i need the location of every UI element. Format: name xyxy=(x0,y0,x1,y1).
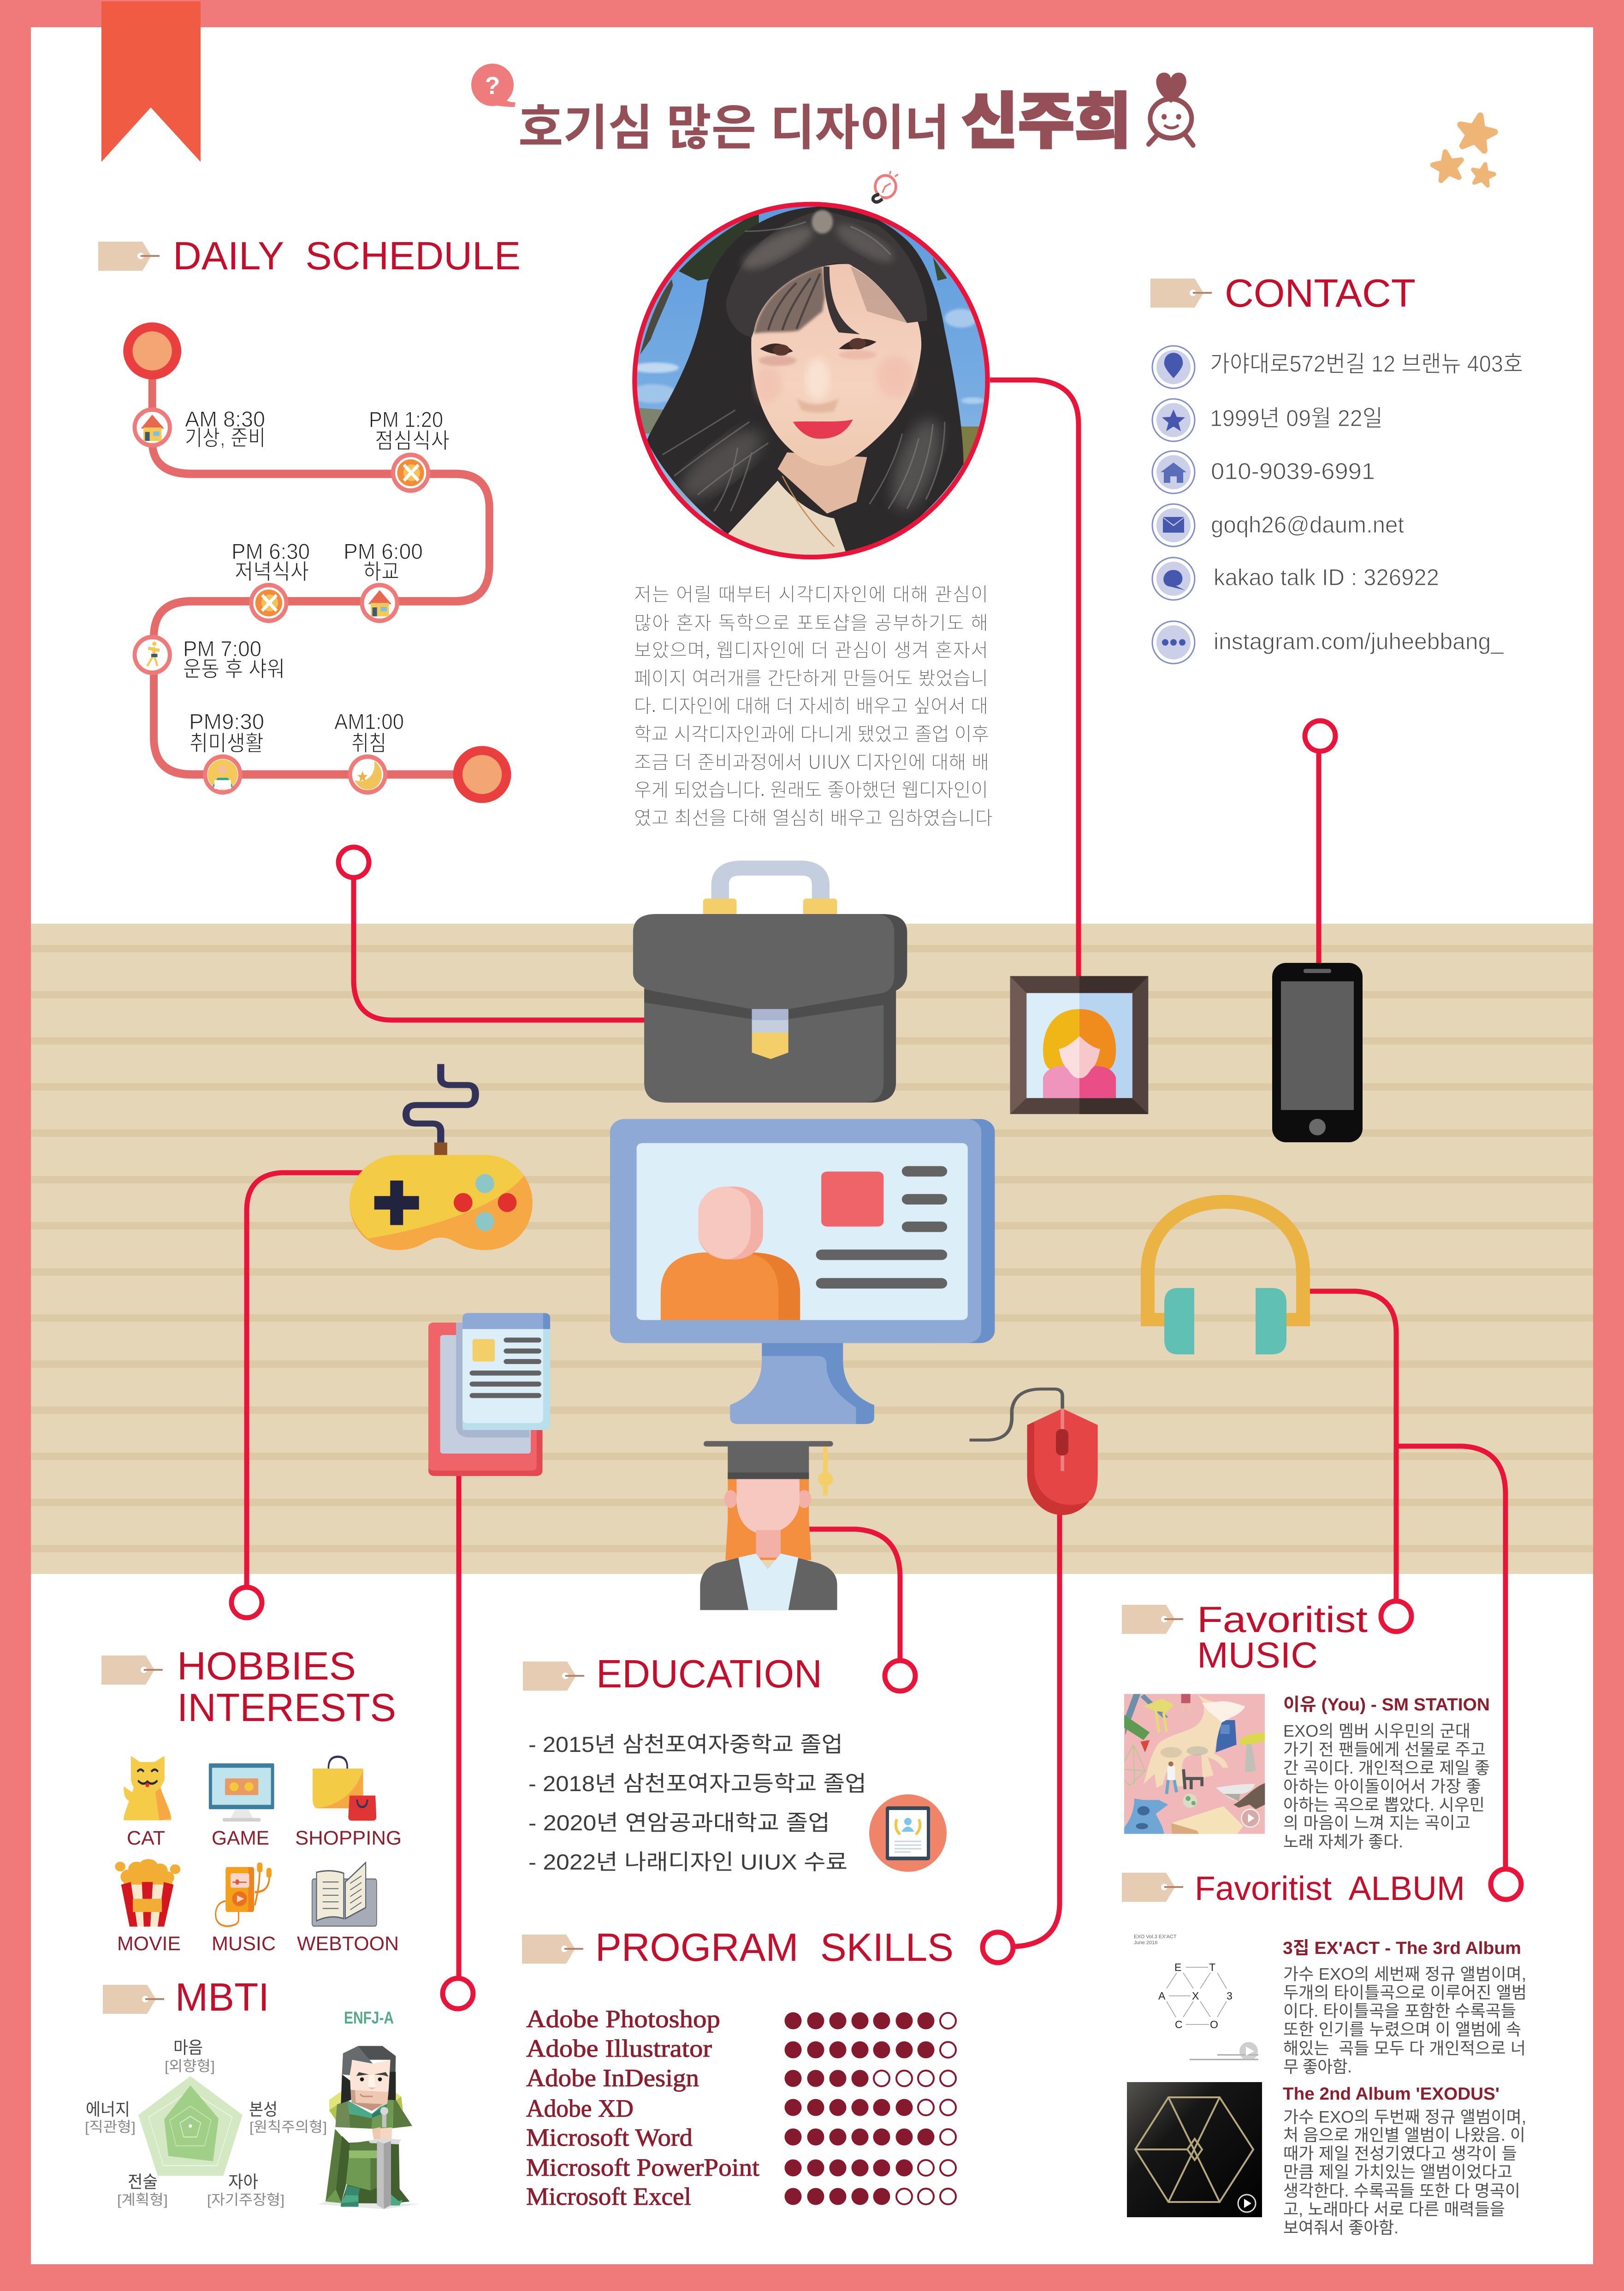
icon: book and notes xyxy=(428,1313,550,1476)
album description: ex'act: 무 좋아함. xyxy=(1283,2057,1352,2076)
radar labels: 전술 xyxy=(128,2172,158,2191)
icon: music player xyxy=(216,1863,272,1926)
schedule route xyxy=(123,322,511,803)
title name: 신주희 xyxy=(961,72,1131,160)
connector lines xyxy=(247,380,1505,1978)
start point xyxy=(123,322,181,380)
album description: exodus: 고, 노래마다 서로 다른 매력들을 xyxy=(1283,2200,1505,2219)
skill names: Adobe XD xyxy=(526,2095,634,2122)
album art: you xyxy=(1124,1694,1265,1834)
icon: popcorn xyxy=(115,1859,180,1927)
album title: 이유 (You) - SM STATION xyxy=(1283,1695,1490,1715)
instagram: instagram.com/juheebbang_ xyxy=(1214,629,1504,654)
label: pm 9:30: 취미생활 xyxy=(190,731,264,755)
kakao: kakao talk ID : 326922 xyxy=(1214,564,1439,590)
album art: ex'act: T xyxy=(1209,1961,1215,1973)
skill rating dots xyxy=(785,2012,956,2205)
heading: MUSIC xyxy=(1197,1634,1318,1675)
education list: - 2018년 삼천포여자고등학교 졸업 xyxy=(528,1771,866,1796)
heading: MBTI xyxy=(175,1976,269,2019)
label: pm 7:00: 운동 후 샤워 xyxy=(183,657,285,681)
label: am 8:30 xyxy=(185,407,266,450)
intro paragraph: 많아 혼자 독학으로 포토샵을 공부하기도 해 xyxy=(634,607,988,635)
album description: exodus: 처 음으로 개인별 앨범이 나왔음. 이 xyxy=(1283,2125,1525,2144)
tag icon xyxy=(98,242,160,271)
heading: INTERESTS xyxy=(177,1686,396,1730)
heading: Favoritist ALBUM xyxy=(1195,1870,1465,1907)
education list: - 2022년 나래디자인 UIUX 수료 xyxy=(528,1850,848,1874)
radar chart xyxy=(138,2076,243,2176)
icon: runner xyxy=(147,641,160,666)
label: am 1:00: AM1:00 xyxy=(334,709,404,734)
hobby labels: CAT xyxy=(127,1827,165,1849)
label: am 8:30: 기상, 준비 xyxy=(185,426,266,450)
route line xyxy=(123,322,511,803)
album description: exodus: 생각한다. 수록곡들 또한 다 명곡이 xyxy=(1283,2181,1520,2200)
album art: ex'act: C xyxy=(1175,2018,1183,2030)
intro paragraph: 였고 최선을 다해 열심히 배우고 임하였습니다 xyxy=(634,802,993,830)
icon: question bubble: ? xyxy=(485,72,500,100)
album description: ex'act: 해있는 곡들 모두 다 개인적으로 너 xyxy=(1283,2039,1526,2058)
skill names: Adobe Illustrator xyxy=(526,2035,712,2062)
icon: star xyxy=(1162,410,1185,431)
label: pm 9:30: PM9:30 xyxy=(189,709,264,734)
hobbies section xyxy=(101,1644,402,1955)
icon: meal lunch xyxy=(397,459,424,486)
mbti section xyxy=(85,1976,420,2209)
radar labels: 자아 xyxy=(228,2172,258,2191)
album art: ex'act: A xyxy=(1158,1990,1166,2002)
radar labels: [외향형] xyxy=(165,2058,215,2074)
label: pm 6:00: PM 6:00 xyxy=(344,539,423,564)
hobby labels: MOVIE xyxy=(117,1933,181,1955)
album art: ex'act: EXO Vol.3 EX'ACT xyxy=(1134,1934,1177,1940)
hobby labels xyxy=(117,1827,402,1955)
email: goqh26@daum.net xyxy=(1211,512,1404,538)
skill names: Adobe Photoshop xyxy=(526,2005,720,2033)
album description: ex'act: 가수 EXO의 세번째 정규 앨범이며, xyxy=(1283,1965,1526,1983)
desk band background xyxy=(31,924,1593,1574)
tag icon xyxy=(1122,1605,1183,1634)
portrait photo xyxy=(627,198,996,567)
album description: exodus xyxy=(1283,2107,1526,2237)
connector end rings xyxy=(231,721,1521,2009)
icon: graduate xyxy=(700,1441,837,1610)
tag icon xyxy=(523,1662,584,1691)
label: pm 6:00: 하교 xyxy=(363,559,399,584)
label: am 1:00: 취침 xyxy=(351,731,386,755)
icon: headphones xyxy=(1141,1202,1310,1354)
icon: house school xyxy=(368,590,391,617)
album description: 간 곡이다. 개인적으로 제일 좋 xyxy=(1283,1758,1490,1777)
label: pm 7:00 xyxy=(183,636,285,681)
heading: CONTACT xyxy=(1225,272,1416,315)
icon: shopping bags xyxy=(313,1757,376,1821)
radar labels: 에너지 xyxy=(86,2100,130,2119)
intro paragraph xyxy=(634,579,993,830)
program skills section xyxy=(522,1926,956,2210)
icon: house morning xyxy=(141,415,164,441)
album art: ex'act xyxy=(1134,1934,1258,2060)
tag icon xyxy=(103,1985,164,2014)
icon: phone xyxy=(1272,963,1363,1142)
end point xyxy=(453,746,511,803)
intro paragraph: 페이지 여러개를 간단하게 만들어도 봤었습니 xyxy=(634,663,988,690)
radar labels: 본성 xyxy=(249,2100,278,2119)
schedule labels xyxy=(183,407,450,755)
icon: meal dinner xyxy=(255,589,282,617)
hobby labels: MUSIC xyxy=(212,1933,276,1955)
radar labels xyxy=(85,2038,327,2208)
icon: smiling girl xyxy=(1149,73,1193,145)
heading: EDUCATION xyxy=(596,1652,822,1696)
tag icon xyxy=(101,1656,163,1685)
tag icon xyxy=(522,1935,583,1964)
tag icon xyxy=(1150,279,1212,308)
icon: person laptop xyxy=(207,760,237,789)
birthday: 1999년 09월 22일 xyxy=(1210,405,1383,431)
label: pm 6:00 xyxy=(344,539,423,584)
heading xyxy=(1197,1599,1368,1675)
album description: 노래 자체가 좋다. xyxy=(1283,1832,1403,1851)
radar labels: [직관형] xyxy=(85,2119,136,2135)
tag icon xyxy=(1122,1873,1183,1902)
education section xyxy=(523,1652,947,1874)
icon: computer monitor xyxy=(610,1119,995,1424)
type label: ENFJ-A xyxy=(344,2008,394,2027)
contact icons xyxy=(1152,346,1195,664)
album description: exodus: 보여줘서 좋아함. xyxy=(1283,2218,1399,2237)
icon: picture frame xyxy=(1010,976,1148,1114)
label: pm 1:20 xyxy=(369,407,450,453)
intro paragraph: 보았으며, 웹디자인에 더 관심이 생겨 혼자서 xyxy=(634,635,988,662)
album description: ex'act: 두개의 타이틀곡으로 이루어진 앨범 xyxy=(1283,1983,1527,2002)
album art: ex'act: E xyxy=(1174,1961,1181,1973)
label: pm 7:00: PM 7:00 xyxy=(183,636,261,661)
icon: open book xyxy=(312,1863,377,1926)
nodes xyxy=(135,410,428,792)
icon: cat xyxy=(124,1756,171,1820)
album art: ex'act: June 2016 xyxy=(1134,1940,1157,1946)
label: pm 1:20: PM 1:20 xyxy=(369,407,443,432)
contact section xyxy=(1150,272,1523,664)
album art: ex'act: 3 xyxy=(1227,1990,1233,2002)
icon: briefcase xyxy=(633,868,907,1103)
album description: 아하는 곡으로 뽑았다. 시우민 xyxy=(1283,1795,1485,1814)
icon: mouse xyxy=(970,1389,1098,1515)
label: pm 6:30 xyxy=(231,539,310,584)
intro paragraph: 조금 더 준비과정에서 UIUX 디자인에 대해 배 xyxy=(634,747,989,774)
heading text: DAILY SCHEDULE xyxy=(173,234,521,278)
hobby icons xyxy=(115,1756,377,1927)
skill names xyxy=(526,2005,759,2210)
intro paragraph: 우게 되었습니다. 원래도 좋아했던 웹디자인이 xyxy=(634,774,988,802)
education list xyxy=(528,1732,866,1874)
label: am 1:00 xyxy=(334,709,404,755)
heading: Favoritist xyxy=(1197,1599,1368,1640)
address: 가야대로572번길 12 브랜뉴 403호 xyxy=(1210,351,1523,377)
album description: 아하는 아이돌이어서 가장 좋 xyxy=(1283,1777,1481,1796)
icon: game monitor xyxy=(209,1763,274,1822)
skill names: Adobe InDesign xyxy=(526,2064,699,2092)
favorite album section xyxy=(1122,1870,1527,2237)
album art: exodus xyxy=(1127,2082,1262,2217)
intro paragraph: 저는 어릴 때부터 시각디자인에 대해 관심이 xyxy=(634,579,988,606)
intro paragraph: 다. 디자인에 대해 더 자세히 배우고 싶어서 대 xyxy=(634,690,988,718)
album description: 의 마음이 느껴 지는 곡이고 xyxy=(1283,1813,1470,1832)
heading xyxy=(177,1644,396,1730)
label: pm 6:30: 저녁식사 xyxy=(235,559,309,584)
radar labels: [원칙주의형] xyxy=(249,2119,327,2135)
icon: location pin xyxy=(1164,353,1183,378)
desk objects xyxy=(350,868,1148,1610)
skill names: Microsoft PowerPoint xyxy=(526,2154,759,2181)
album art: ex'act: X xyxy=(1192,1990,1199,2002)
album description: 가기 전 팬들에게 선물로 주고 xyxy=(1283,1740,1486,1759)
album description: ex'act: 이다. 타이틀곡을 포함한 수록곡들 xyxy=(1283,2001,1516,2020)
album description: EXO의 멤버 시우민의 군대 xyxy=(1283,1721,1470,1740)
phone: 010-9039-6991 xyxy=(1211,458,1375,484)
label: pm 1:20: 점심식사 xyxy=(375,428,450,453)
icon: certificate xyxy=(869,1794,947,1872)
album description xyxy=(1283,1721,1490,1851)
label: pm 6:30: PM 6:30 xyxy=(231,539,310,564)
album title: exodus: The 2nd Album 'EXODUS' xyxy=(1283,2084,1500,2104)
skill names: Microsoft Excel xyxy=(526,2183,691,2210)
skill names: Microsoft Word xyxy=(526,2124,693,2151)
character: low-poly mentor xyxy=(318,2046,420,2209)
title xyxy=(471,64,1193,160)
label: pm 9:30 xyxy=(189,709,264,755)
label: am 8:30: AM 8:30 xyxy=(185,407,265,431)
icon: moon xyxy=(355,761,382,790)
icon: question bubble xyxy=(471,64,516,107)
icon: mail xyxy=(1163,517,1184,533)
icon: house xyxy=(1161,463,1186,483)
album description: ex'act: 또한 인기를 누렸으며 이 앨범에 속 xyxy=(1283,2020,1521,2039)
education list: - 2020년 연암공과대학교 졸업 xyxy=(528,1810,830,1835)
hobby labels: SHOPPING xyxy=(295,1827,402,1849)
title text: 호기심 많은 디자이너 xyxy=(518,88,949,159)
heading: daily schedule xyxy=(98,234,521,278)
education list: - 2015년 삼천포여자중학교 졸업 xyxy=(528,1732,843,1757)
hobby labels: WEBTOON xyxy=(297,1933,399,1955)
radar labels: [자기주장형] xyxy=(207,2192,284,2208)
icon: game controller xyxy=(350,1064,533,1250)
intro paragraph: 학교 시각디자인과에 다니게 됐었고 졸업 이후 xyxy=(634,718,989,746)
heading: PROGRAM SKILLS xyxy=(595,1926,954,1970)
album description: exodus: 만큼 제일 가치있는 앨범이었다고 xyxy=(1283,2162,1512,2181)
album description: exodus: 가수 EXO의 두번째 정규 앨범이며, xyxy=(1283,2107,1526,2126)
radar labels: [계획형] xyxy=(117,2192,168,2208)
hobby labels: GAME xyxy=(212,1827,269,1849)
bookmark ribbon xyxy=(101,1,201,162)
icon: light bulb xyxy=(873,171,898,202)
icon: more dots xyxy=(1162,639,1185,646)
icon: chat xyxy=(1163,570,1185,590)
heading: HOBBIES xyxy=(177,1644,356,1688)
album description: ex'act xyxy=(1283,1965,1527,2076)
album title: ex'act: 3집 EX'ACT - The 3rd Album xyxy=(1283,1939,1521,1958)
album description: exodus: 때가 제일 전성기였다고 생각이 들 xyxy=(1283,2144,1517,2163)
album art: ex'act: O xyxy=(1210,2018,1218,2030)
radar labels: 마음 xyxy=(173,2038,203,2057)
favorite music section xyxy=(1122,1599,1490,1851)
icon: stars xyxy=(1431,112,1497,186)
